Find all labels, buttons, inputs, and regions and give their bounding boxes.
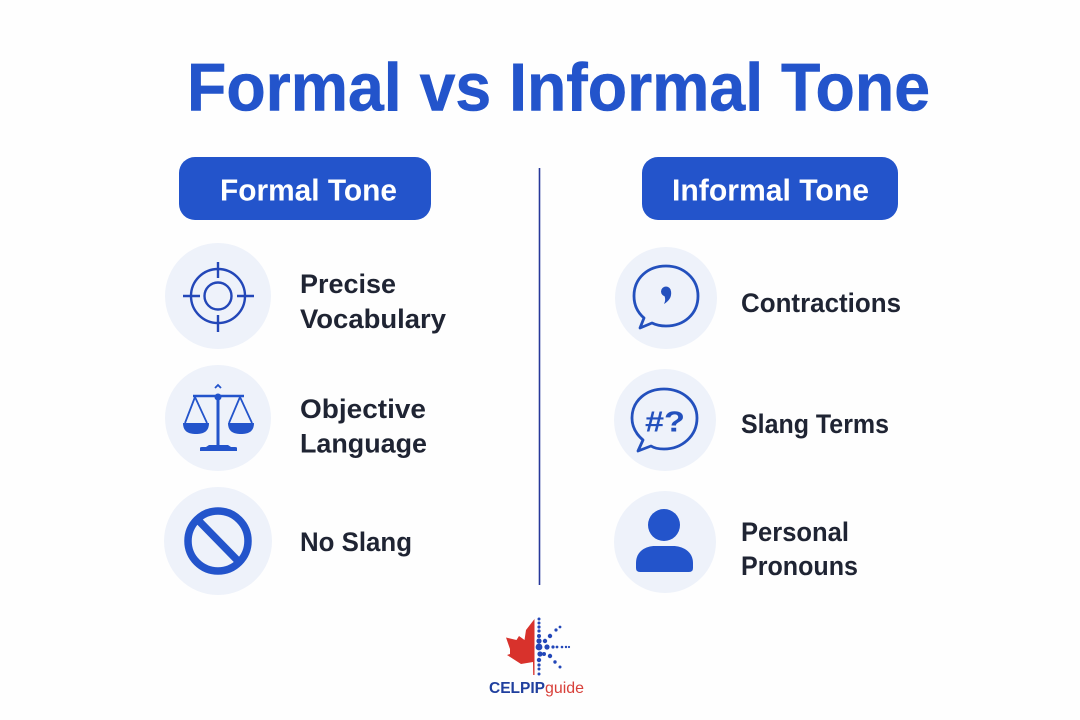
text: precise vocabulary: Precise: [300, 269, 396, 299]
text: contractions: Contractions: [741, 288, 901, 318]
icon: balance scales: [165, 365, 271, 471]
text: objective language: [300, 394, 427, 458]
heading: formal tone: [179, 157, 431, 220]
icon: speech bubble with slang symbols: [614, 369, 716, 471]
panel: informal tone: [614, 157, 901, 593]
icon: speech bubble with comma: [615, 247, 717, 349]
heading: informal tone: Informal Tone: [672, 172, 869, 208]
heading: informal tone: [642, 157, 898, 220]
icon: prohibition sign: [164, 487, 272, 595]
logo wordmark: CELPIPguide: [489, 680, 584, 697]
text: precise vocabulary: [300, 269, 446, 334]
text: objective language: Language: [300, 428, 427, 458]
text: no slang: No Slang: [300, 527, 412, 557]
icon: person: [614, 491, 716, 593]
text: slang terms: Slang Terms: [741, 409, 889, 439]
icon: dots: [536, 618, 570, 676]
text: personal pronouns: Pronouns: [741, 551, 858, 581]
title: Formal vs Informal Tone: [187, 50, 930, 126]
text: personal pronouns: Personal: [741, 517, 849, 547]
divider line: [539, 168, 540, 585]
icon: target: [165, 243, 271, 349]
icon: half maple leaf: [506, 619, 534, 675]
text: personal pronouns: [741, 517, 858, 581]
text: precise vocabulary: Vocabulary: [300, 304, 446, 334]
text: objective language: Objective: [300, 394, 426, 424]
panel: formal tone: [164, 157, 446, 595]
logo: CELPIPguide: [489, 618, 584, 697]
icon: speech bubble with slang symbols: #?: [645, 406, 685, 438]
heading: formal tone: Formal Tone: [220, 172, 397, 208]
